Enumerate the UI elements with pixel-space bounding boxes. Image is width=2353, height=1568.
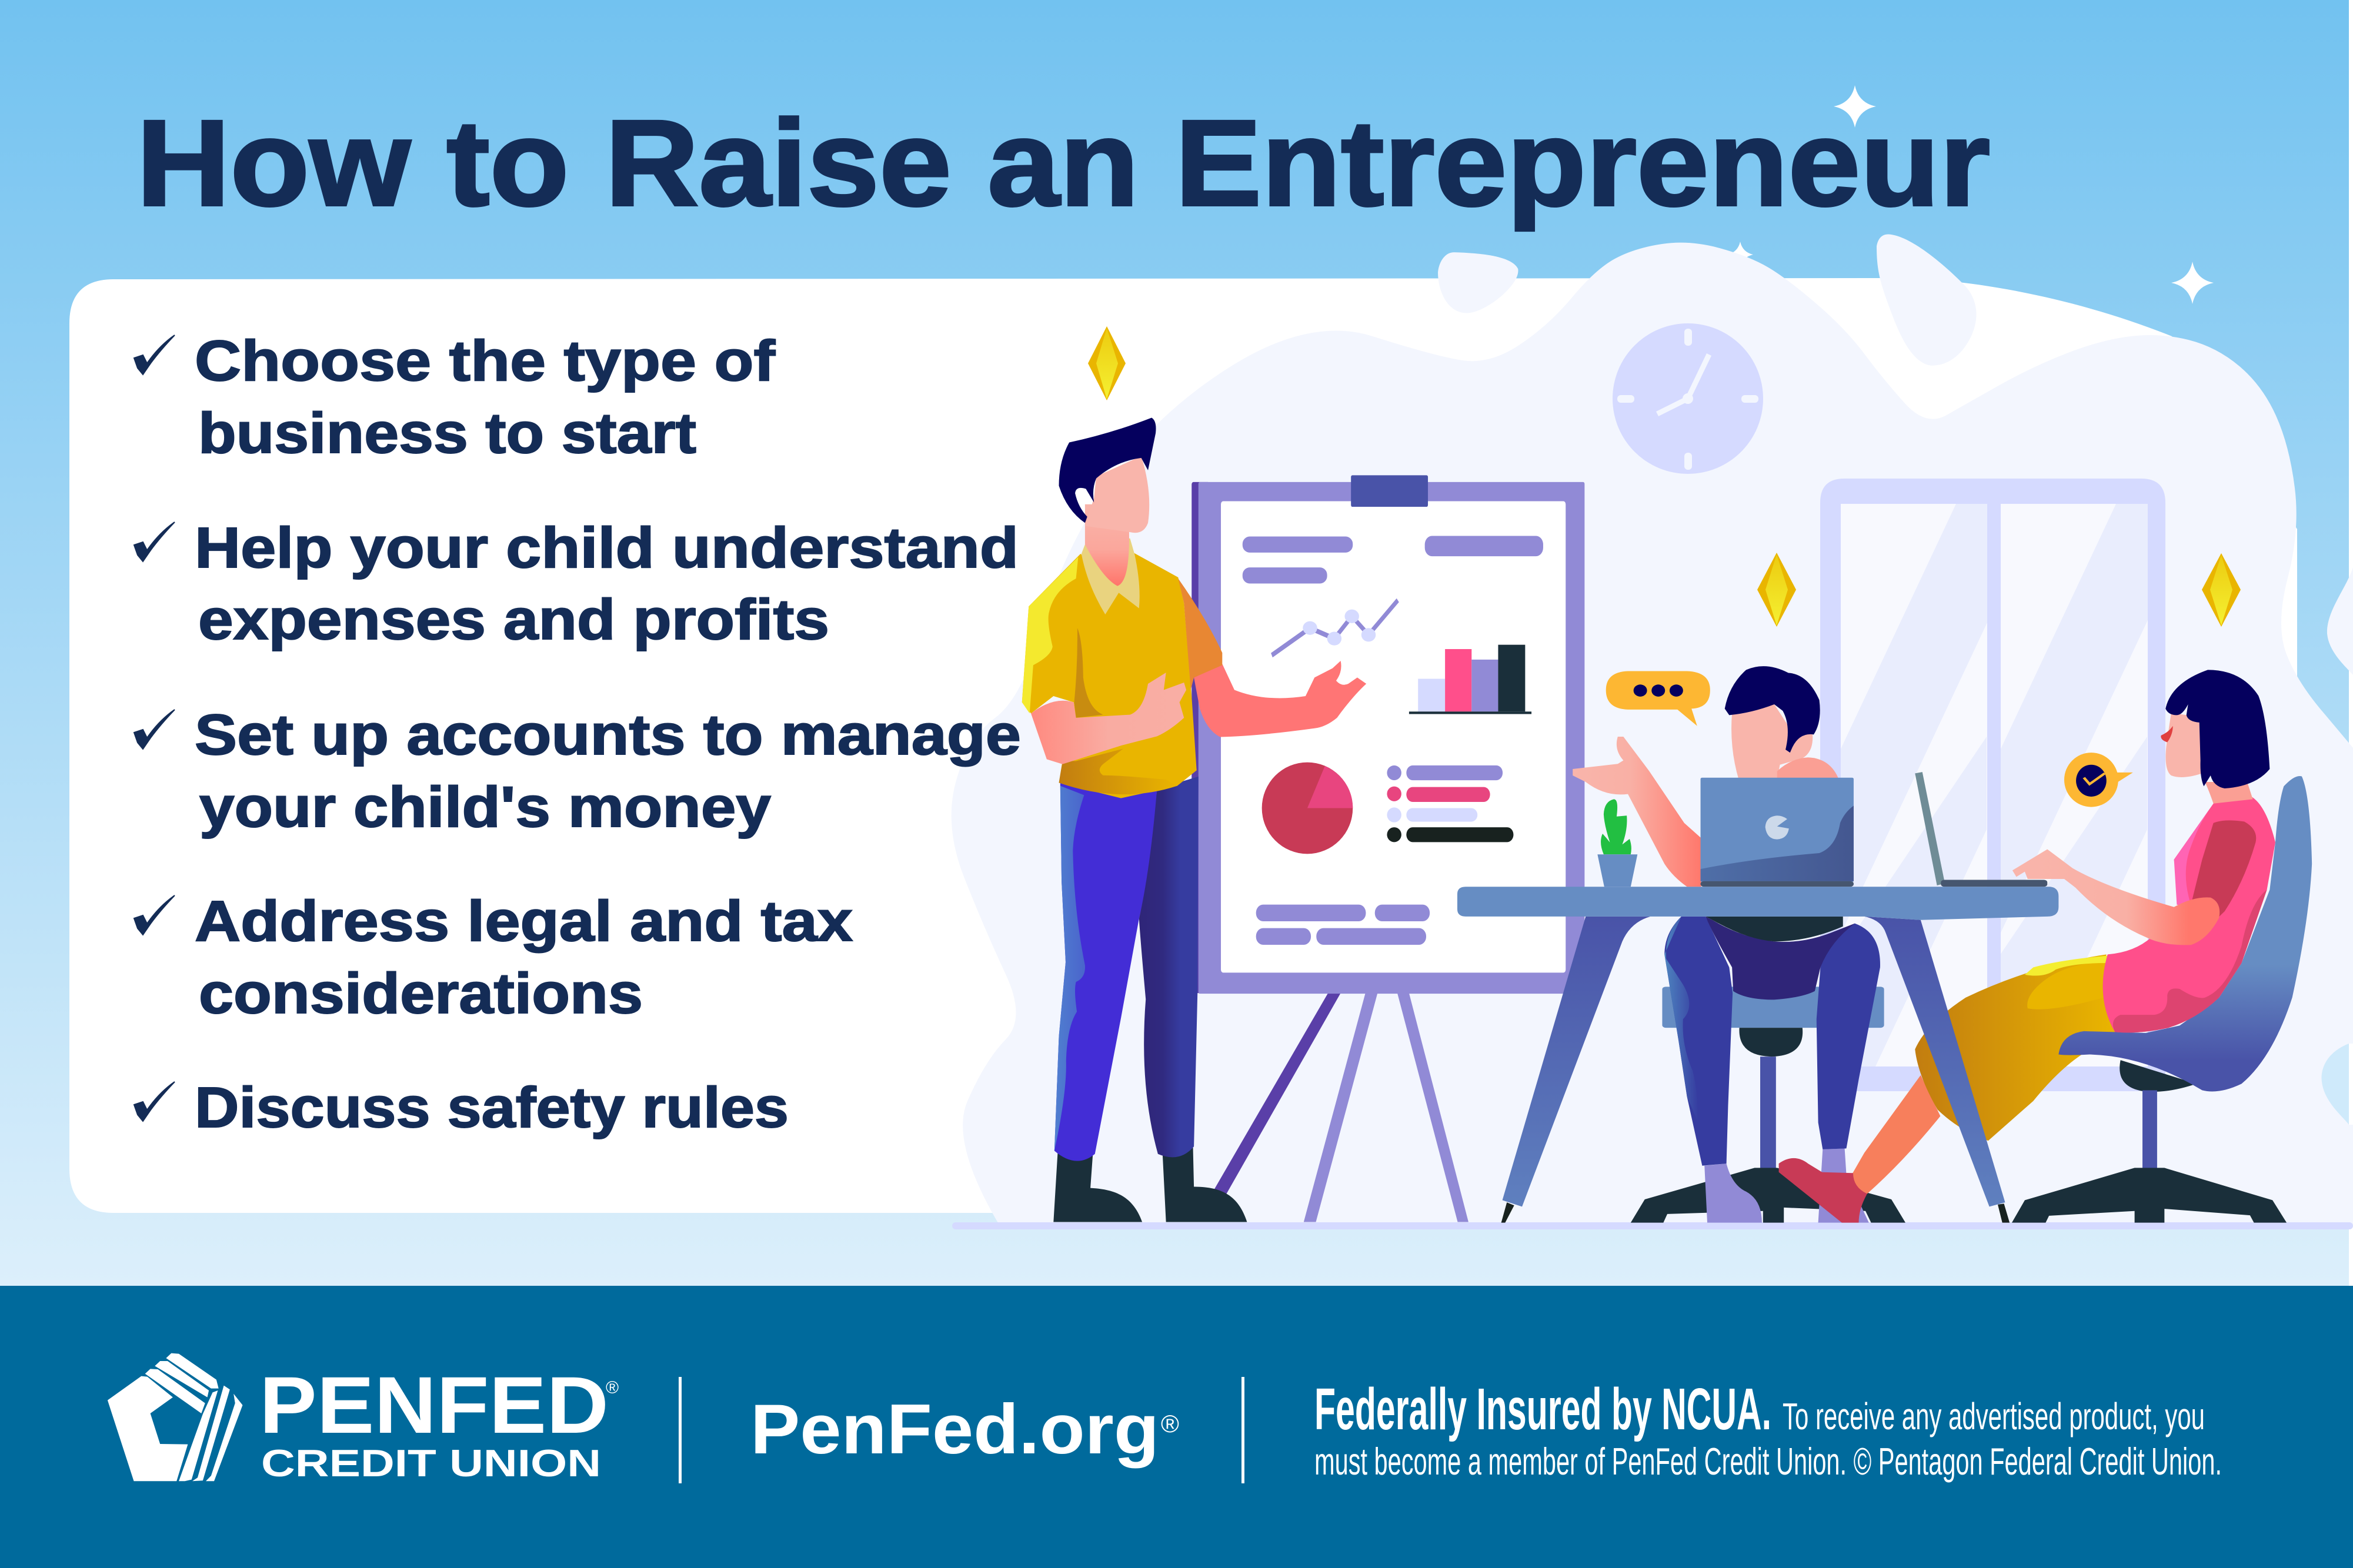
icon: check mark bbox=[134, 710, 175, 749]
gesturing arm bbox=[1573, 737, 1701, 887]
potted plant bbox=[1597, 799, 1637, 887]
icon: check mark bbox=[134, 1082, 175, 1121]
board text lines bbox=[1243, 536, 1543, 945]
lips bbox=[2161, 726, 2173, 743]
pale lens on right edge bbox=[2322, 1044, 2349, 1125]
chart legend bbox=[1387, 765, 1513, 842]
chair base bbox=[2012, 1168, 2287, 1223]
chair stem bbox=[1739, 1028, 1803, 1057]
checklist item 3: your child's money bbox=[199, 775, 771, 839]
website: PenFed.org: PenFed.org bbox=[750, 1390, 1159, 1469]
icon: gem above presenter bbox=[1088, 326, 1126, 400]
desk legs bbox=[1501, 917, 2010, 1223]
window bbox=[1820, 479, 2165, 1091]
sparkle star: right bbox=[2171, 262, 2214, 304]
socks and shoes bbox=[1704, 1148, 1869, 1223]
icon: gem above woman bbox=[2202, 553, 2241, 627]
chair base bbox=[1631, 1168, 1905, 1223]
dress bbox=[2103, 794, 2275, 1032]
speech bubble with dots bbox=[1606, 671, 1710, 726]
checklist item 1: business to start bbox=[198, 401, 696, 465]
sparkle star: top bbox=[1834, 85, 1876, 128]
collar bbox=[1082, 539, 1140, 614]
presenter man figure bbox=[1022, 417, 1366, 1222]
website: PenFed.org: ® bbox=[1161, 1410, 1179, 1437]
board frame bbox=[1191, 475, 1584, 994]
chair stem bbox=[2120, 1060, 2197, 1092]
shoe bbox=[1779, 1158, 1867, 1223]
checklist item 1 bbox=[134, 329, 776, 465]
chair column bbox=[1760, 1057, 1776, 1169]
sparkle star hidden behind blob bbox=[1727, 242, 1753, 268]
hair bbox=[1725, 666, 1820, 753]
bar chart bbox=[1409, 645, 1531, 714]
easel with presentation board bbox=[1191, 475, 1584, 1222]
hair bbox=[1059, 417, 1156, 523]
chair seat bbox=[1662, 987, 1884, 1028]
shoulder bbox=[1777, 757, 1839, 780]
easel legs bbox=[1213, 993, 1468, 1222]
floor line bbox=[952, 1222, 2353, 1229]
checklist item 2 bbox=[134, 516, 1019, 651]
checklist item 4: considerations bbox=[199, 961, 643, 1025]
decorative drops bbox=[1438, 234, 1977, 366]
checklist item 4: Address legal and tax bbox=[195, 889, 853, 953]
desk top bbox=[1457, 887, 2058, 920]
head bbox=[1731, 704, 1813, 780]
divider bbox=[1241, 1377, 1244, 1483]
logo wordmark: PENFED CREDIT UNION: PENFED bbox=[259, 1360, 609, 1450]
logo: PenFed pentagon mark bbox=[108, 1353, 242, 1481]
face bbox=[1085, 456, 1149, 533]
title: How to Raise an Entrepreneur bbox=[136, 95, 1990, 232]
checklist item 3: Set up accounts to manage bbox=[195, 703, 1021, 767]
divider bbox=[679, 1377, 682, 1483]
icon: check mark bbox=[134, 522, 175, 561]
logo wordmark: PENFED CREDIT UNION: CREDIT UNION bbox=[261, 1442, 601, 1485]
trousers bbox=[1664, 917, 1880, 1166]
shin bbox=[1852, 1075, 1940, 1193]
illustration backdrop blob bbox=[952, 243, 2353, 1226]
pie chart bbox=[1262, 763, 1353, 854]
right edge white strip segment bbox=[2349, 1044, 2353, 1125]
right edge blob accent bbox=[2327, 567, 2353, 675]
open laptop bbox=[1915, 772, 2047, 887]
check speech bubble bbox=[2064, 753, 2133, 807]
skirt bbox=[1915, 954, 2115, 1141]
shirt bbox=[1022, 551, 1222, 798]
desk bbox=[1457, 887, 2058, 1223]
checklist item 2: Help your child understand bbox=[195, 516, 1019, 580]
checklist item 1: Choose the type of bbox=[195, 329, 776, 393]
chair column bbox=[2142, 1090, 2157, 1170]
neck bbox=[2205, 782, 2253, 804]
neck bbox=[1085, 504, 1130, 586]
checklist item 4 bbox=[134, 889, 853, 1025]
shoes bbox=[1053, 1148, 1247, 1222]
line chart bbox=[1271, 600, 1398, 656]
reaching arm bbox=[2012, 849, 2220, 945]
legal disclosure text bbox=[1314, 1376, 2222, 1483]
legal disclosure text: Federally Insured by NCUA. bbox=[1314, 1376, 1771, 1442]
back arm bbox=[1194, 661, 1366, 737]
woman on chair bbox=[1779, 670, 2312, 1223]
icon: check mark bbox=[134, 335, 175, 375]
checklist item 5: Discuss safety rules bbox=[195, 1075, 789, 1139]
seated man with office chair bbox=[1573, 666, 1905, 1223]
chair shell bbox=[2058, 776, 2312, 1092]
front arm bbox=[1031, 673, 1186, 764]
hair bbox=[2165, 670, 2269, 788]
panel: white content card bbox=[69, 278, 2297, 1213]
logo wordmark: PENFED CREDIT UNION: ® bbox=[606, 1378, 619, 1398]
footer band bbox=[0, 1286, 2353, 1568]
laptop bbox=[1701, 778, 1854, 887]
icon: wall clock bbox=[1613, 323, 1763, 474]
icon: check mark bbox=[134, 895, 175, 935]
checklist item 3 bbox=[134, 703, 1021, 839]
trousers bbox=[1054, 777, 1199, 1161]
icon: gem above seated man bbox=[1757, 553, 1796, 627]
face bbox=[2165, 713, 2202, 777]
checklist item 2: expenses and profits bbox=[198, 587, 829, 651]
logo wordmark: PENFED CREDIT UNION bbox=[259, 1360, 619, 1485]
